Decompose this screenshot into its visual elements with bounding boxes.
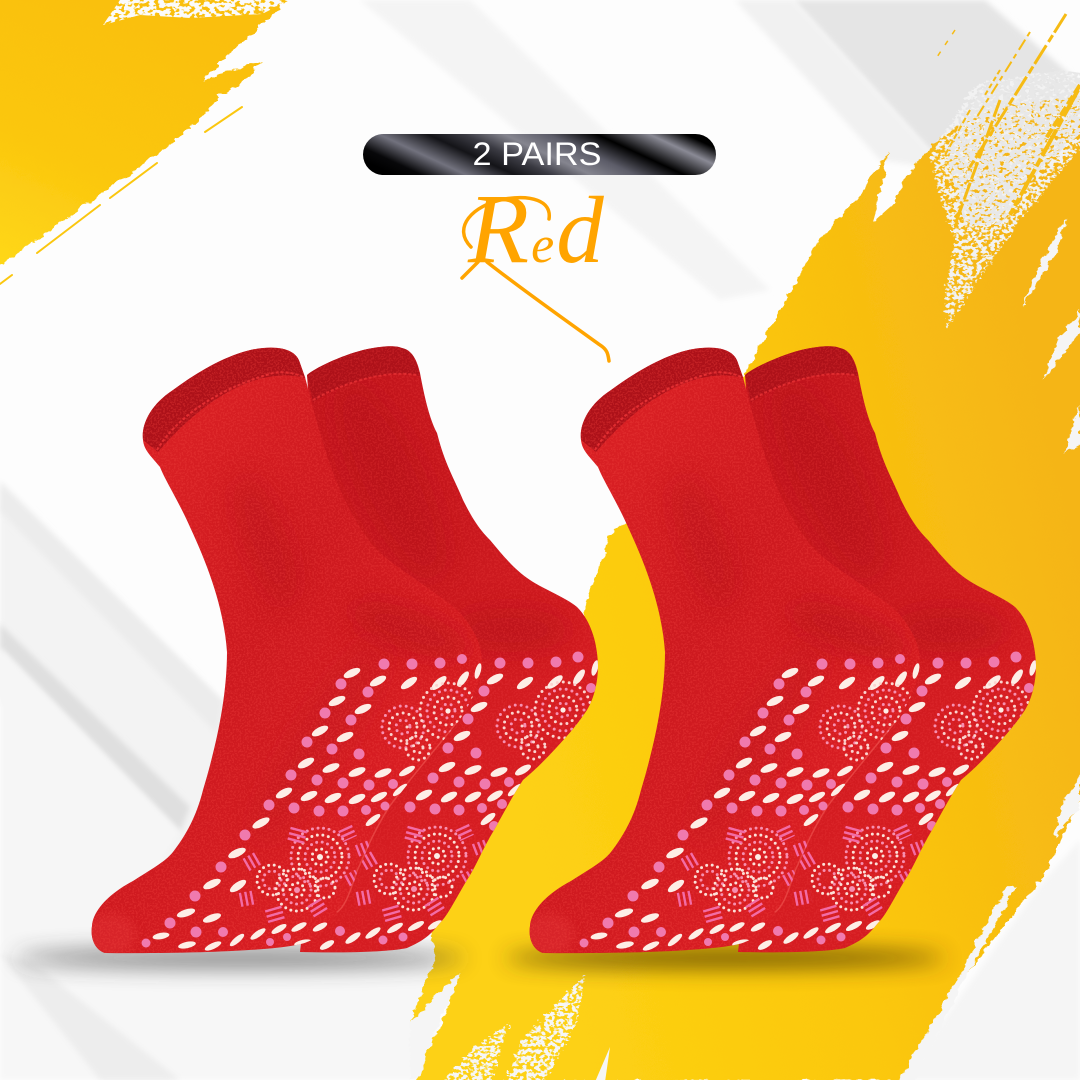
white brush strokes over yellow <box>410 218 1080 1080</box>
ground shadow under right pair <box>505 948 945 968</box>
colour name script: Red <box>467 173 604 284</box>
socks pair left <box>84 345 600 957</box>
yellow brush stroke right <box>410 14 1080 1080</box>
pill label: 2 PAIRS <box>472 136 602 172</box>
R top swash and tail flourish <box>462 198 609 361</box>
socks pair right <box>522 345 1038 957</box>
colour name script <box>462 173 609 361</box>
streaky brush texture top right <box>930 70 1080 328</box>
ground shadow under left pair <box>15 948 465 968</box>
pill badge <box>363 134 716 175</box>
yellow brush stroke top left <box>0 0 297 284</box>
white flecks along top <box>103 0 290 25</box>
